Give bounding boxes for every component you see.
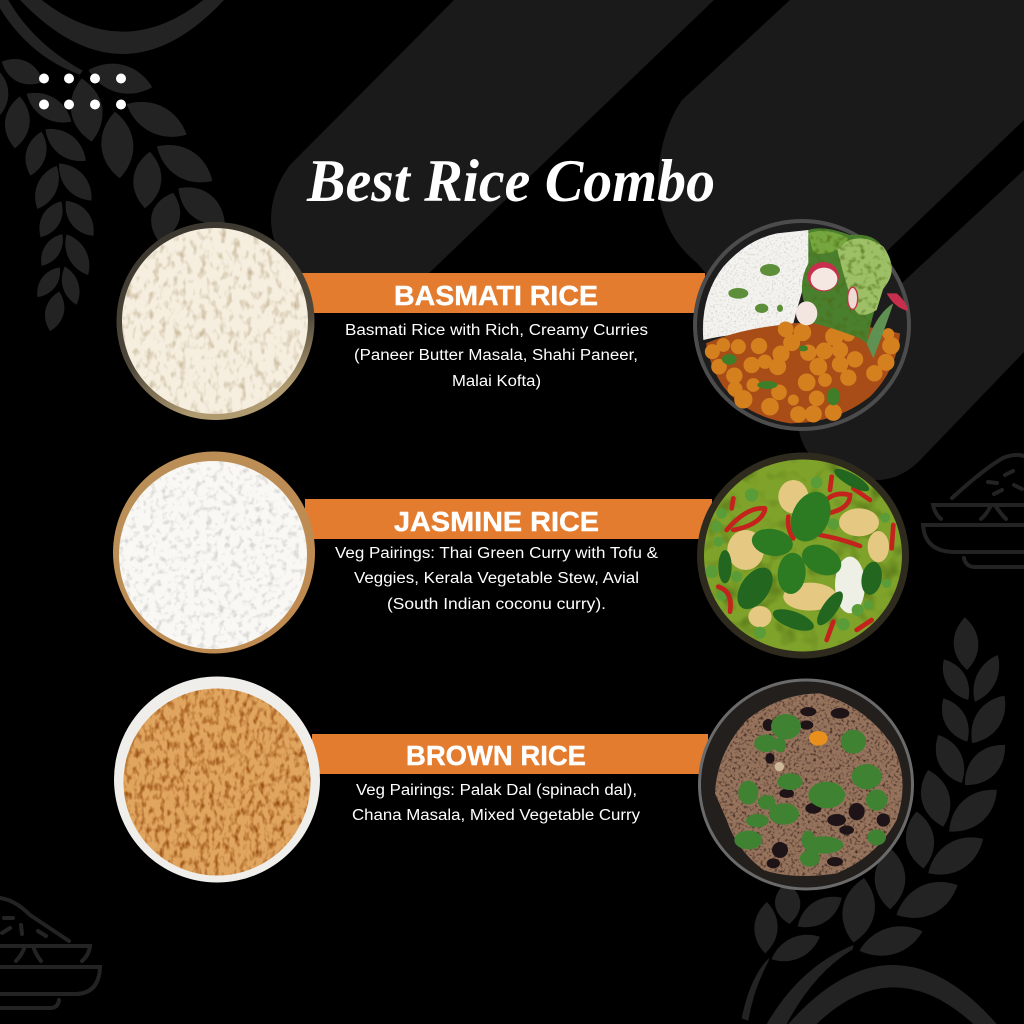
icon: rice bowl outline right <box>923 455 1024 567</box>
decorative dots <box>39 74 126 110</box>
description: basmati rice <box>345 322 648 390</box>
description: basmati rice: Basmati Rice with Rich, Creamy Curries <box>345 322 648 339</box>
diagonal background bands <box>271 0 1024 480</box>
description: brown rice: Chana Masala, Mixed Vegetable Curry <box>352 807 640 824</box>
description: jasmine rice: Veggies, Kerala Vegetable Stew, Avial <box>354 570 639 587</box>
bowl: basmati raw rice <box>116 222 314 420</box>
description: jasmine rice: Veg Pairings: Thai Green Curry with Tofu & <box>335 545 659 562</box>
orange bar: brown <box>312 734 708 774</box>
description: brown rice: Veg Pairings: Palak Dal (spinach dal), <box>356 782 637 799</box>
bowl: brown rice with beans and herbs <box>698 678 914 890</box>
wheat ornament: bottom right <box>742 617 1015 1024</box>
wheat ornament: top left <box>0 0 233 333</box>
bowl: rice with chickpea curry and salad <box>693 219 911 431</box>
description: jasmine rice <box>335 545 659 613</box>
heading: jasmine rice: JASMINE RICE <box>394 506 599 537</box>
bowl: jasmine raw rice <box>113 452 315 654</box>
heading: brown rice: BROWN RICE <box>406 740 586 771</box>
icon: rice bowl outline left <box>0 898 100 1008</box>
description: basmati rice: Malai Kofta) <box>452 373 541 390</box>
description: basmati rice: (Paneer Butter Masala, Shahi Paneer, <box>354 347 638 364</box>
title: Best Rice Combo <box>306 148 715 214</box>
heading: basmati rice: BASMATI RICE <box>394 280 598 311</box>
section: basmati rice <box>116 219 911 431</box>
description: brown rice <box>352 782 640 824</box>
bowl: thai green curry <box>697 452 909 658</box>
description: jasmine rice: (South Indian coconu curry). <box>387 596 606 613</box>
section: brown rice <box>114 676 914 890</box>
orange bar: basmati <box>300 273 705 313</box>
bowl: brown raw rice <box>114 676 320 882</box>
section: jasmine rice <box>113 452 909 658</box>
orange bar: jasmine <box>305 499 712 539</box>
